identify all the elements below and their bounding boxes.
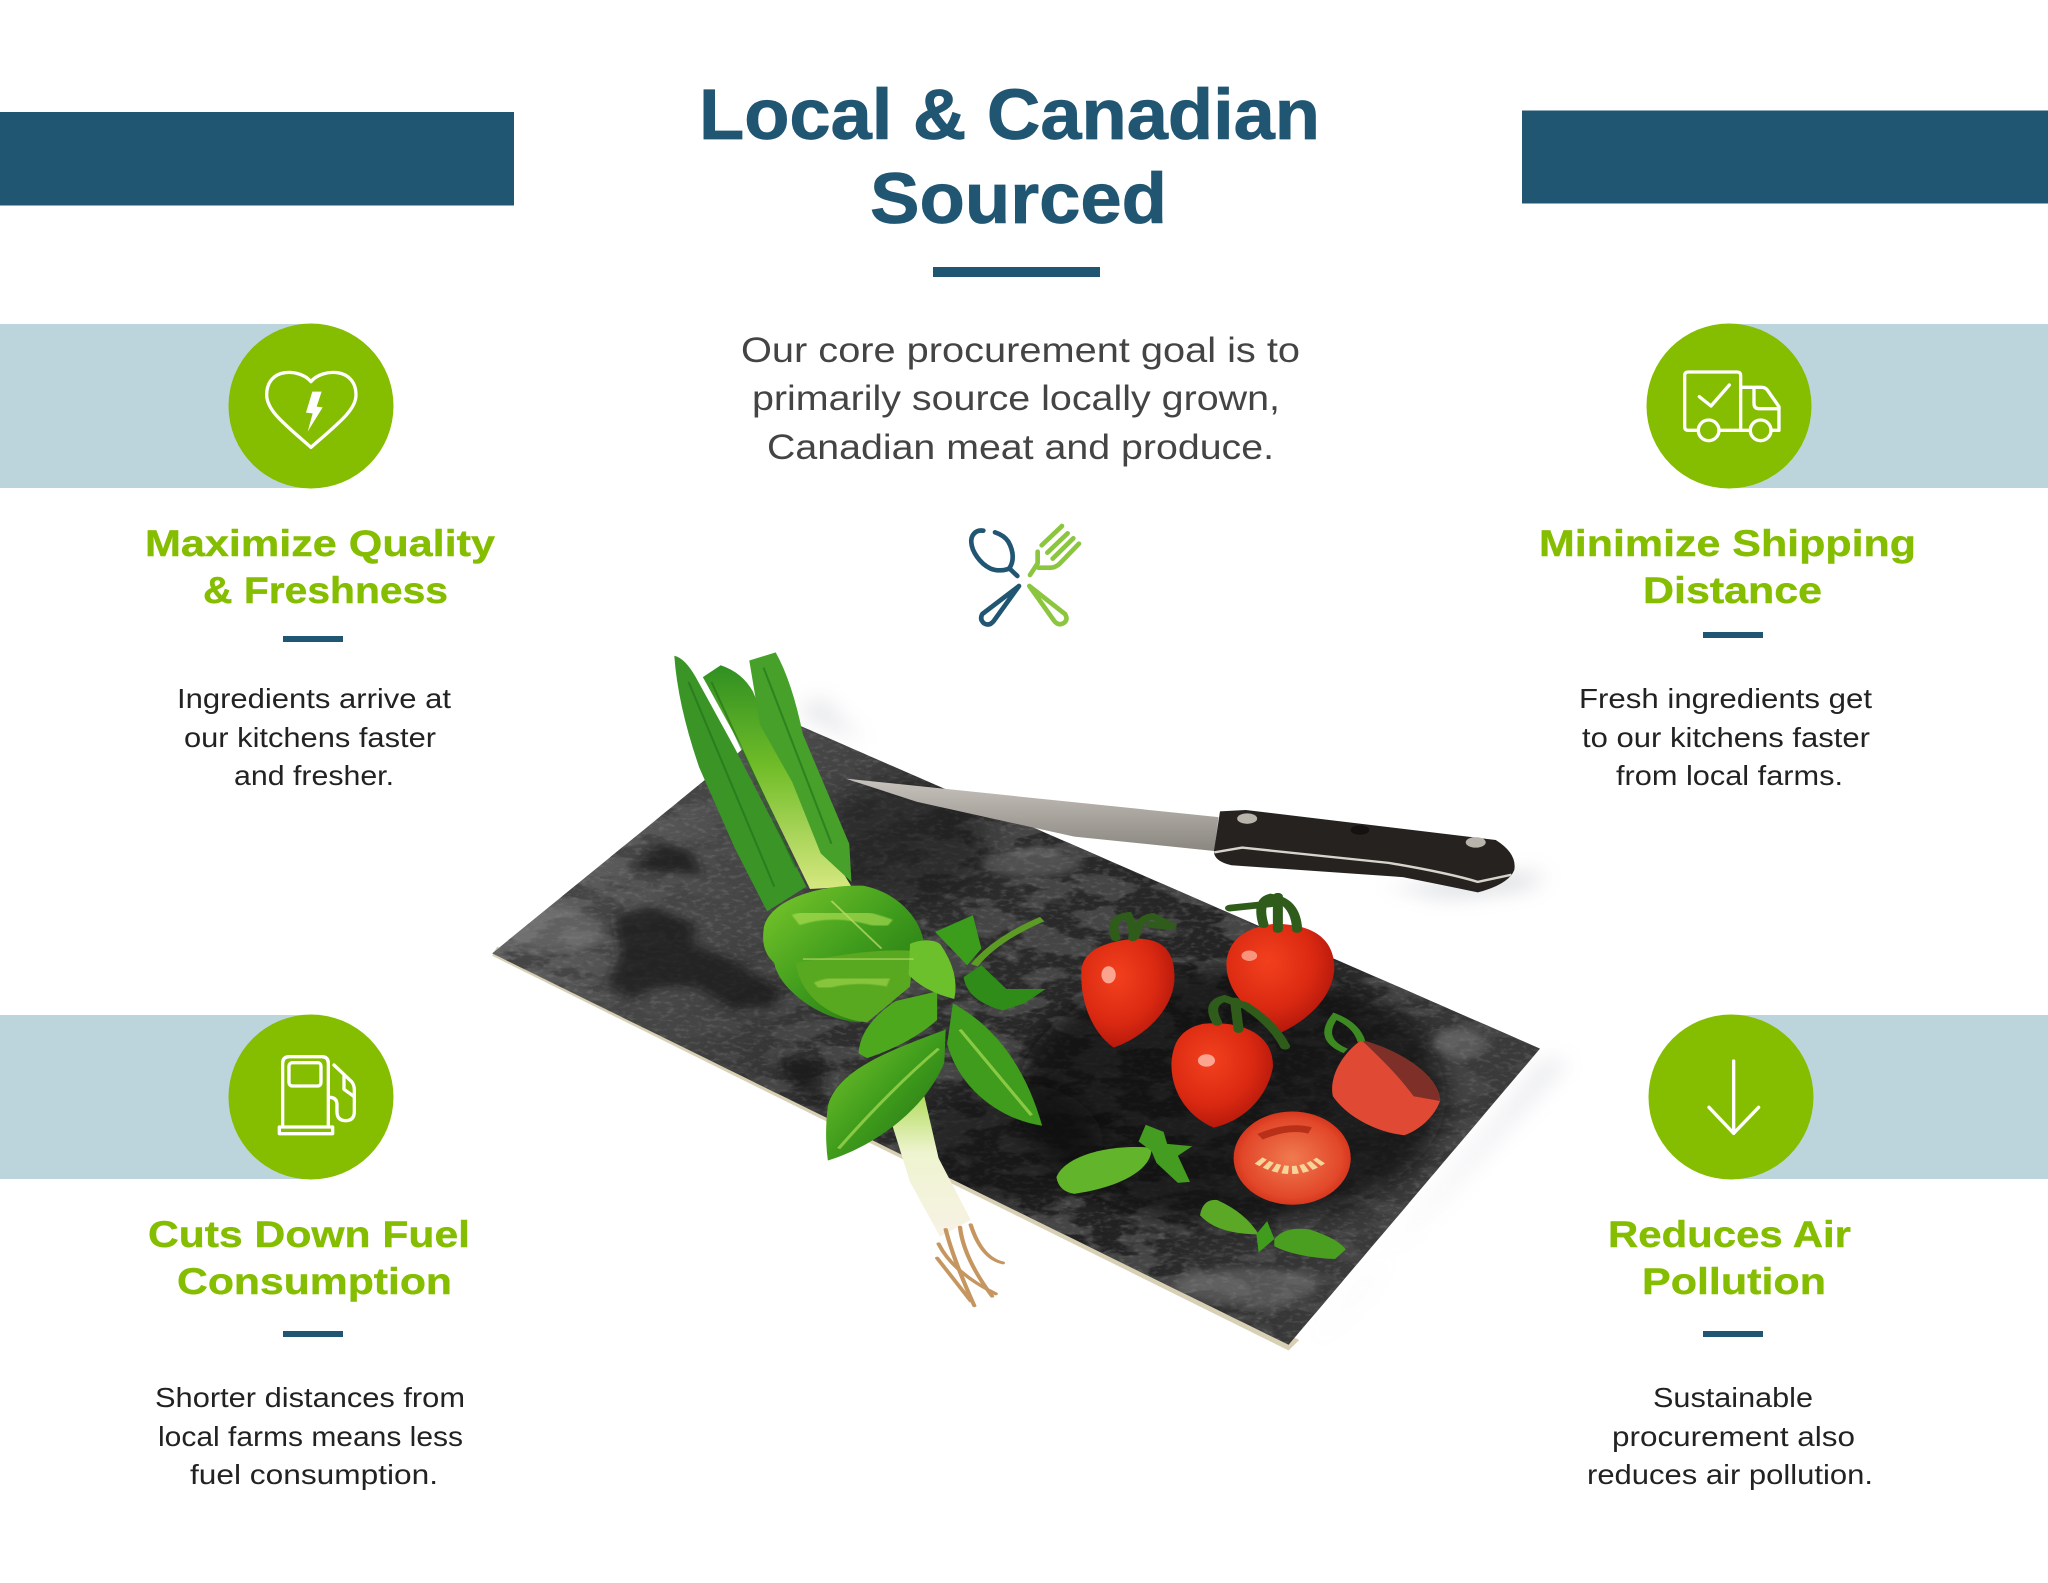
- board texture: [497, 728, 1540, 1344]
- board: [492, 718, 1540, 1345]
- scallion: [674, 652, 971, 1237]
- heading: Distance: [1643, 569, 1822, 611]
- panel: maximize quality and freshness: [0, 324, 495, 791]
- body text: our kitchens faster: [184, 722, 436, 753]
- tomato 3: [1171, 999, 1285, 1128]
- icon: down arrow: [1648, 1014, 1814, 1180]
- body text: fuel consumption.: [190, 1459, 438, 1490]
- title: Local & Canadian: [699, 76, 1320, 155]
- title: Sourced: [870, 160, 1167, 239]
- panel: reduces air pollution: [1587, 1014, 2048, 1490]
- tomato 2: [1226, 896, 1334, 1032]
- board edge: [492, 947, 1299, 1350]
- body text: [177, 683, 451, 791]
- body text: Shorter distances from: [155, 1382, 465, 1413]
- tomatoes: [1081, 896, 1440, 1205]
- body text: and fresher.: [234, 760, 394, 791]
- panel: minimize shipping distance: [1539, 324, 2048, 791]
- banner bar: top left: [0, 112, 514, 206]
- icon: fuel pump: [228, 1014, 394, 1180]
- light patches on the board: [503, 849, 1489, 1306]
- heading: Consumption: [177, 1260, 452, 1302]
- title underline: [933, 267, 1100, 277]
- icon: spoon and knife handle: [971, 530, 1019, 625]
- body text: from local farms.: [1616, 760, 1843, 791]
- heading: [1608, 1213, 1851, 1302]
- basil: lower right leaf: [947, 1003, 1042, 1126]
- title: [699, 76, 1320, 239]
- body text: procurement also: [1612, 1421, 1855, 1452]
- divider: [1703, 1331, 1763, 1337]
- heading: Reduces Air: [1608, 1213, 1851, 1255]
- band: [1731, 1015, 2048, 1179]
- basil: large top leaf: [763, 886, 924, 1022]
- body text: Ingredients arrive at: [177, 683, 451, 714]
- heading: Cuts Down Fuel: [148, 1213, 470, 1255]
- heading: & Freshness: [203, 569, 448, 611]
- dark blotches on the board: [606, 841, 824, 1106]
- knife: [846, 779, 1515, 892]
- heading: Minimize Shipping: [1539, 522, 1916, 564]
- band: [0, 1015, 311, 1179]
- band: [1729, 324, 2048, 488]
- band: [0, 324, 311, 488]
- tomato 4 cut: [1328, 1016, 1440, 1135]
- photo: slate board with knife, scallion, basil and tomatoes: [460, 652, 1574, 1358]
- tomato 5 cut: [1234, 1111, 1351, 1205]
- divider: [1703, 632, 1763, 638]
- intro text block: [741, 331, 1300, 467]
- scallion roots: [937, 1225, 1003, 1306]
- shadows: [803, 691, 1560, 1353]
- icon: delivery truck: [1646, 324, 1812, 488]
- intro text block: Our core procurement goal is to: [741, 331, 1300, 370]
- heading: [1539, 522, 1916, 611]
- body text: to our kitchens faster: [1582, 722, 1870, 753]
- small basil leaves: [1056, 1125, 1346, 1259]
- basil: lower left leaf: [826, 1030, 946, 1160]
- body text: local farms means less: [158, 1421, 463, 1452]
- heading: [148, 1213, 470, 1302]
- intro text block: Canadian meat and produce.: [767, 428, 1274, 467]
- body text: Sustainable: [1653, 1382, 1813, 1413]
- body text: reduces air pollution.: [1587, 1459, 1873, 1490]
- banner bar: top right: [1522, 110, 2048, 204]
- heading: [145, 522, 495, 611]
- icon: heart with lightning bolt: [228, 324, 394, 488]
- intro text block: primarily source locally grown,: [752, 379, 1280, 418]
- basil bunch: [763, 886, 1046, 1160]
- panel: cuts down fuel consumption: [0, 1014, 470, 1490]
- icon: spoon and fork: [971, 526, 1079, 625]
- tomato 1: [1081, 915, 1174, 1048]
- body text: [155, 1382, 465, 1490]
- body text: [1587, 1382, 1873, 1490]
- heading: Maximize Quality: [145, 522, 495, 564]
- divider: [283, 1331, 343, 1337]
- body text: [1579, 683, 1872, 791]
- divider: [283, 636, 343, 642]
- body text: Fresh ingredients get: [1579, 683, 1872, 714]
- icon: fork: [1029, 526, 1079, 624]
- heading: Pollution: [1642, 1260, 1826, 1302]
